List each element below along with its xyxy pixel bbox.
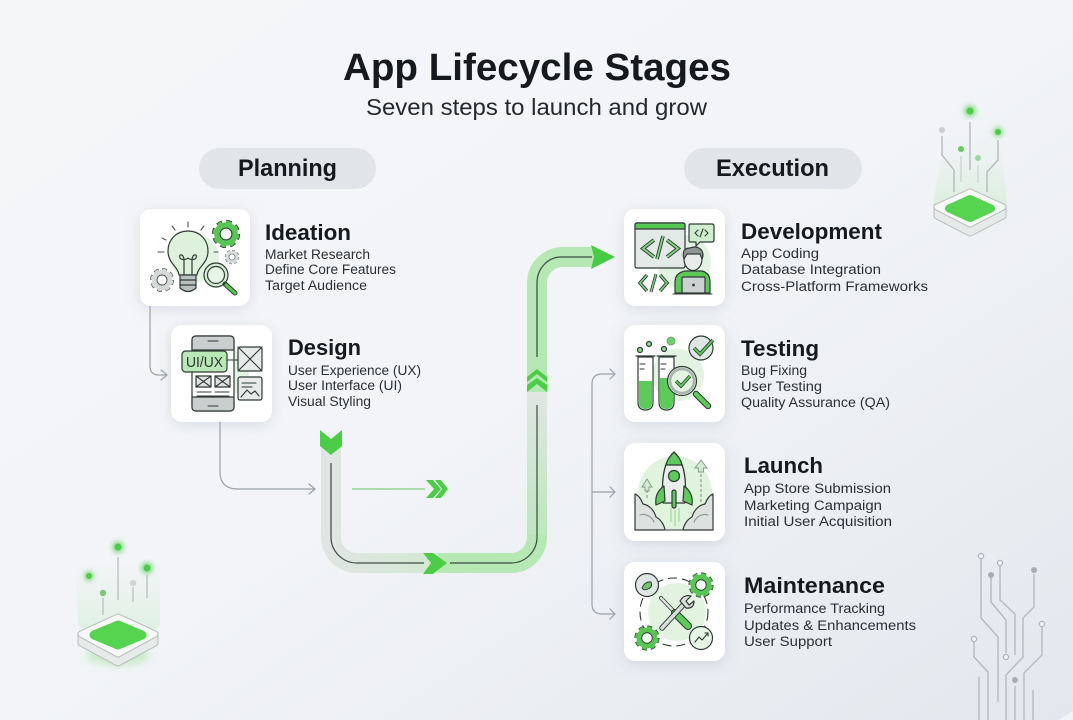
- text: Development: Database Integration: [741, 262, 881, 277]
- text: Maintenance: Updates & Enhancements: [744, 618, 916, 633]
- decoration: glowing platform top right: [933, 105, 1007, 233]
- text: Ideation: [265, 220, 396, 293]
- text: Launch: Marketing Campaign: [744, 498, 882, 513]
- green double arrow: [352, 480, 448, 498]
- arrowhead: to development: [591, 245, 615, 269]
- card: Launch: [624, 443, 892, 541]
- icon: UI/UX phone wireframe: [182, 336, 262, 411]
- text: Ideation: Ideation: [265, 220, 351, 245]
- connector: design to pipe: [220, 422, 315, 494]
- text: Development: App Coding: [741, 246, 819, 261]
- card: Maintenance: [624, 562, 916, 661]
- text: Design: [288, 335, 421, 409]
- icon: rocket: [635, 452, 713, 530]
- text: Design: Design: [288, 335, 361, 360]
- chevron: right middle: [423, 553, 447, 574]
- main lifecycle pipe arrow: [320, 245, 615, 574]
- text: Testing: Bug Fixing: [741, 363, 807, 378]
- pill: Planning: Planning: [238, 155, 337, 182]
- subtitle: Seven steps to launch and grow: [366, 94, 707, 120]
- icon: tools and cycle: [636, 574, 712, 650]
- text: Ideation: Market Research: [265, 247, 370, 262]
- card: Development: [624, 209, 928, 306]
- text: Launch: App Store Submission: [744, 481, 891, 496]
- icon: UI/UX phone wireframe: UI/UX: [186, 354, 223, 371]
- card: Testing: [624, 325, 890, 422]
- text: Maintenance: Maintenance: [744, 573, 885, 598]
- text: Design: Visual Styling: [288, 394, 371, 409]
- text: Maintenance: Performance Tracking: [744, 601, 885, 616]
- chevron: down: [320, 430, 342, 455]
- text: Maintenance: User Support: [744, 634, 832, 649]
- pill: Planning: [199, 148, 376, 189]
- text: Testing: [741, 336, 890, 410]
- card: Ideation: [140, 209, 396, 306]
- text: Launch: Initial User Acquisition: [744, 514, 892, 529]
- decoration: glowing platform bottom left: [75, 541, 160, 665]
- text: Testing: Testing: [741, 336, 819, 361]
- text: Launch: Launch: [744, 453, 823, 478]
- text: Maintenance: [744, 573, 916, 649]
- text: Development: Development: [741, 219, 883, 244]
- text: Ideation: Define Core Features: [265, 262, 396, 277]
- text: Launch: [744, 453, 892, 529]
- text: Design: User Experience (UX): [288, 363, 421, 378]
- pill: Execution: [684, 148, 862, 189]
- card: Design: [171, 325, 421, 422]
- text: Ideation: Target Audience: [265, 278, 367, 293]
- chevron: double up: [527, 369, 547, 392]
- icon: developer with code window: [635, 223, 714, 294]
- connector: execution branches: [592, 369, 615, 619]
- text: Testing: Quality Assurance (QA): [741, 395, 890, 410]
- text: Design: User Interface (UI): [288, 378, 402, 393]
- text: Testing: User Testing: [741, 379, 822, 394]
- pill: Execution: Execution: [716, 155, 829, 182]
- text: Development: Cross-Platform Frameworks: [741, 279, 928, 294]
- decoration: circuit traces bottom right: [971, 553, 1045, 720]
- connector: ideation to design: [150, 306, 167, 380]
- icon: light bulb with gears: [154, 222, 237, 293]
- icon: test tubes and magnifier: [636, 336, 713, 410]
- title: App Lifecycle Stages: [343, 47, 731, 89]
- text: Development: [741, 219, 928, 294]
